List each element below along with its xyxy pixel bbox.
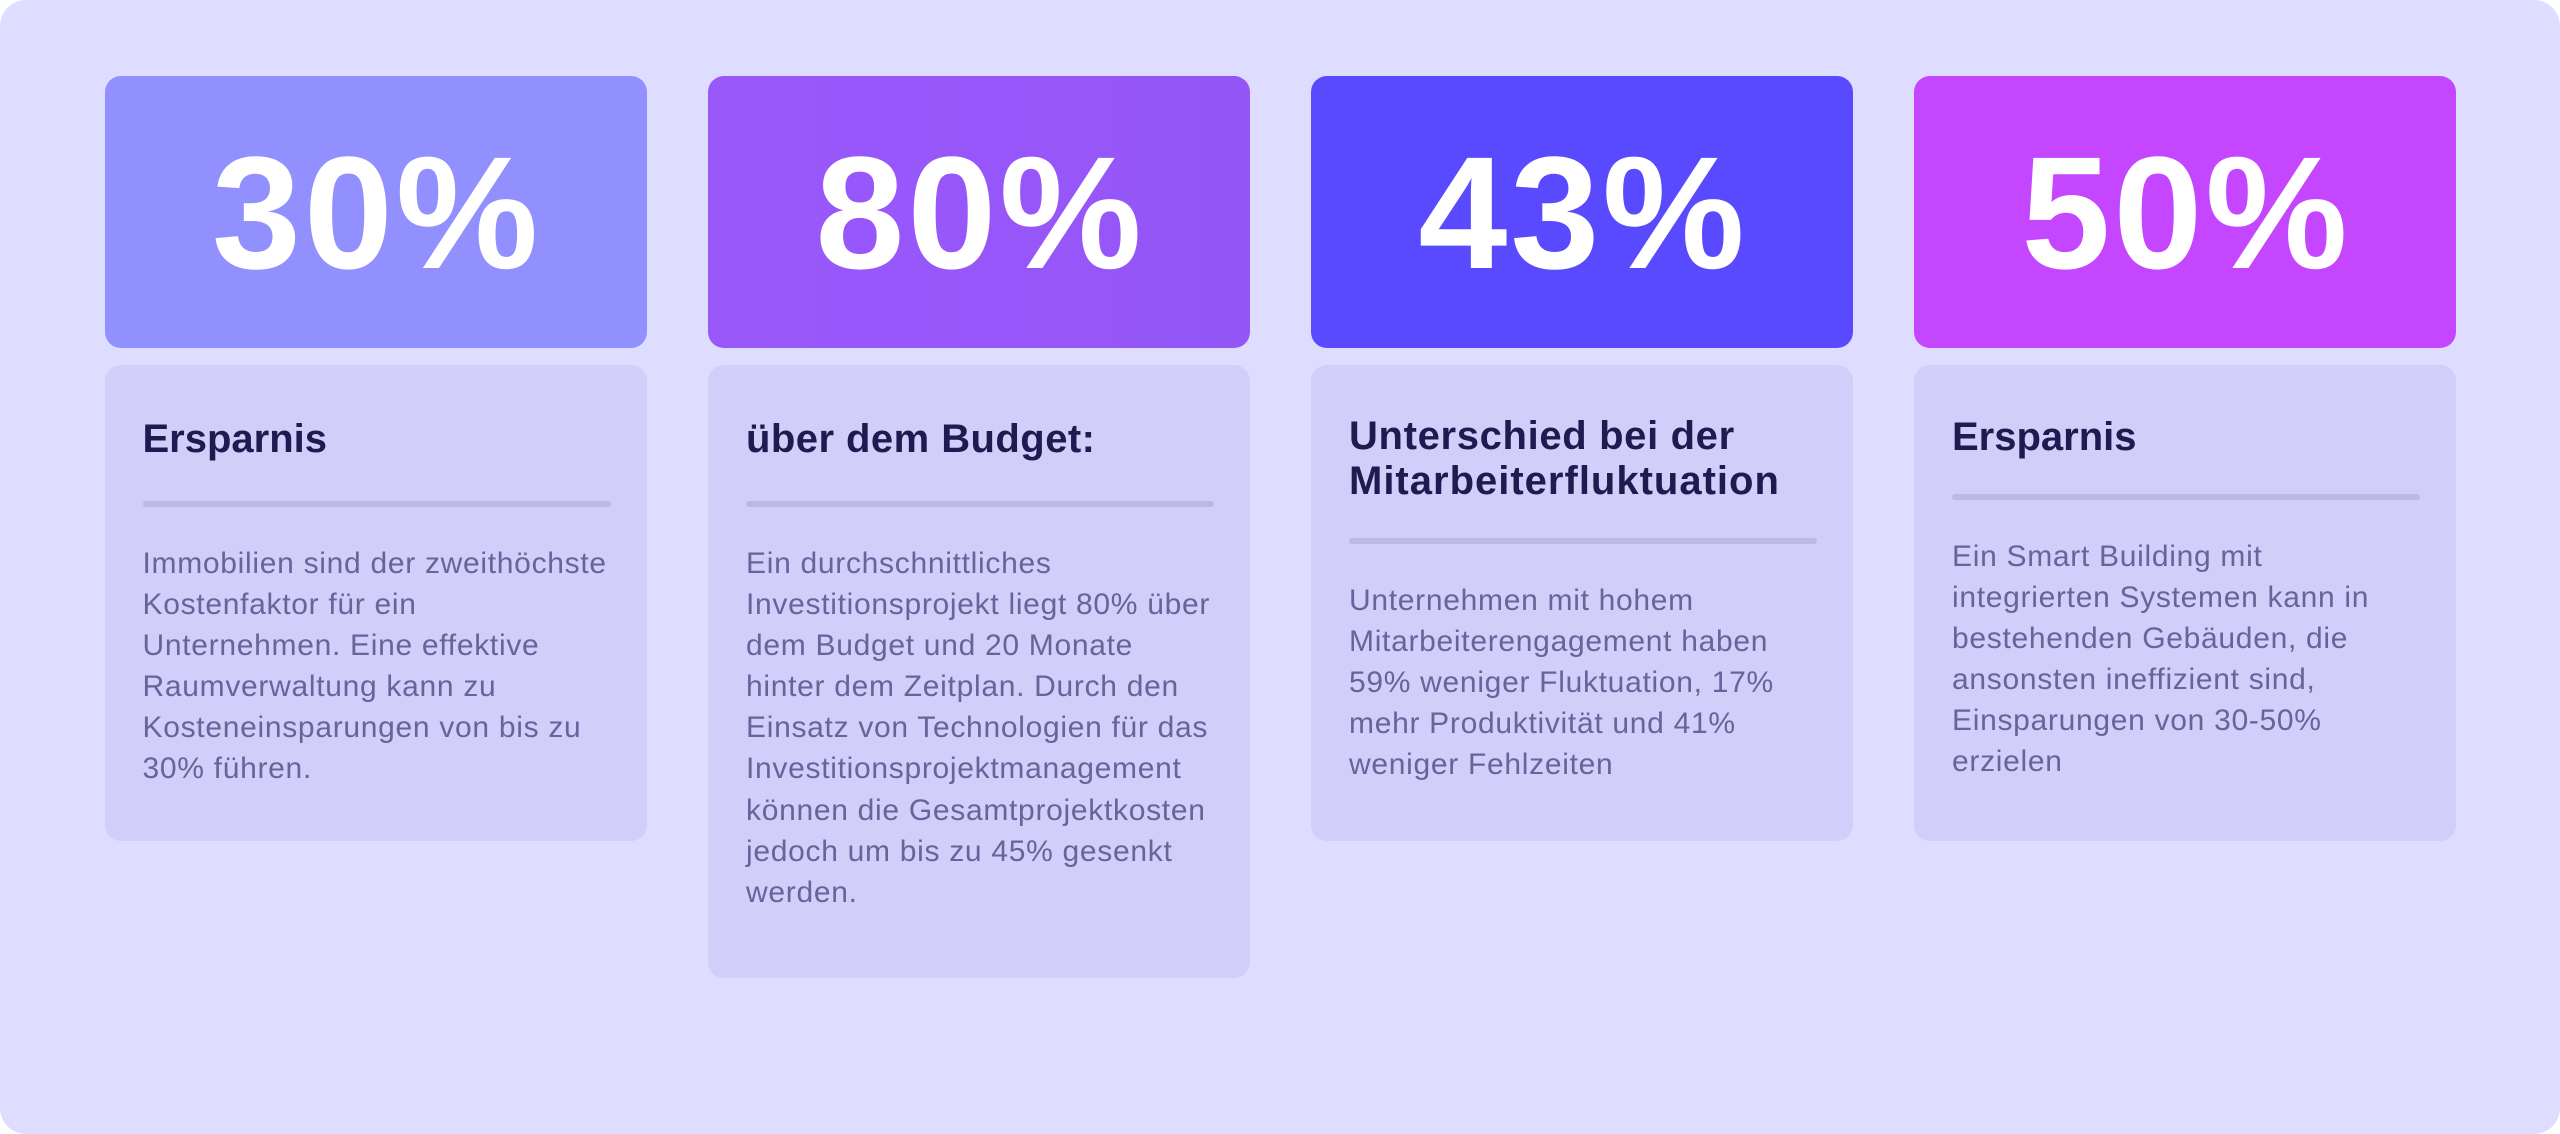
body text: 30% führen. — [142, 752, 312, 785]
number: 30%: 30% — [212, 123, 541, 302]
heading: Ersparnis — [1952, 415, 2137, 459]
number: 80%: 80% — [815, 123, 1145, 302]
heading: Mitarbeiterfluktuation — [1349, 459, 1780, 503]
body text: können die Gesamtprojektkosten — [746, 794, 1206, 827]
panel: Mitarbeiterfluktuation — [1311, 365, 1853, 841]
body text: Kosteneinsparungen von bis zu — [142, 711, 581, 744]
body text: 59% weniger Fluktuation, 17% — [1349, 666, 1774, 699]
body text: Ein Smart Building mit — [1952, 540, 2263, 573]
body text: hinter dem Zeitplan. Durch den — [746, 670, 1179, 703]
divider — [746, 501, 1214, 507]
body text: bestehenden Gebäuden, die — [1952, 622, 2348, 655]
body text: dem Budget und 20 Monate — [746, 629, 1133, 662]
panel: über dem Budget — [708, 365, 1250, 978]
body text: ansonsten ineffizient sind, — [1952, 663, 2316, 696]
body text — [745, 547, 1210, 909]
divider — [1349, 538, 1817, 544]
body text: erzielen — [1952, 745, 2063, 778]
stat box: 50% — [1914, 76, 2456, 348]
body text: Einsparungen von 30-50% — [1952, 704, 2322, 737]
body text: Unternehmen. Eine effektive — [142, 629, 539, 662]
body text: Einsatz von Technologien für das — [746, 711, 1208, 744]
body text: werden. — [746, 876, 858, 909]
body text: Raumverwaltung kann zu — [142, 670, 496, 703]
body text: weniger Fehlzeiten — [1349, 748, 1613, 781]
body text: Immobilien sind der zweithöchste — [142, 547, 607, 580]
body text: integrierten Systemen kann in — [1952, 581, 2369, 614]
number: 50%: 50% — [2021, 123, 2351, 302]
panel: Ersparnis 30% — [104, 365, 646, 841]
body text: jedoch um bis zu 45% gesenkt — [746, 835, 1173, 868]
heading: Unterschied bei der — [1349, 414, 1735, 458]
body text: Ein durchschnittliches — [746, 547, 1052, 580]
stat box: 30% — [104, 76, 646, 348]
number: 43%: 43% — [1418, 123, 1748, 302]
body text: Investitionsprojekt liegt 80% über — [746, 588, 1210, 621]
heading: über dem Budget: — [746, 417, 1095, 461]
heading: Ersparnis — [142, 417, 327, 461]
heading — [1349, 414, 1780, 503]
stat box: 43% — [1311, 76, 1853, 348]
body text — [1349, 584, 1774, 781]
body text: Investitionsprojektmanagement — [746, 752, 1182, 785]
panel: Ersparnis 50% — [1914, 365, 2456, 841]
body text — [1952, 540, 2369, 778]
divider — [1952, 494, 2420, 500]
body text: Unternehmen mit hohem — [1349, 584, 1694, 617]
body text — [142, 547, 607, 785]
stat box: 80% — [708, 76, 1250, 348]
body text: Kostenfaktor für ein — [142, 588, 417, 621]
body text: Mitarbeiterengagement haben — [1349, 625, 1768, 658]
body text: mehr Produktivität und 41% — [1349, 707, 1736, 740]
divider — [142, 501, 610, 507]
